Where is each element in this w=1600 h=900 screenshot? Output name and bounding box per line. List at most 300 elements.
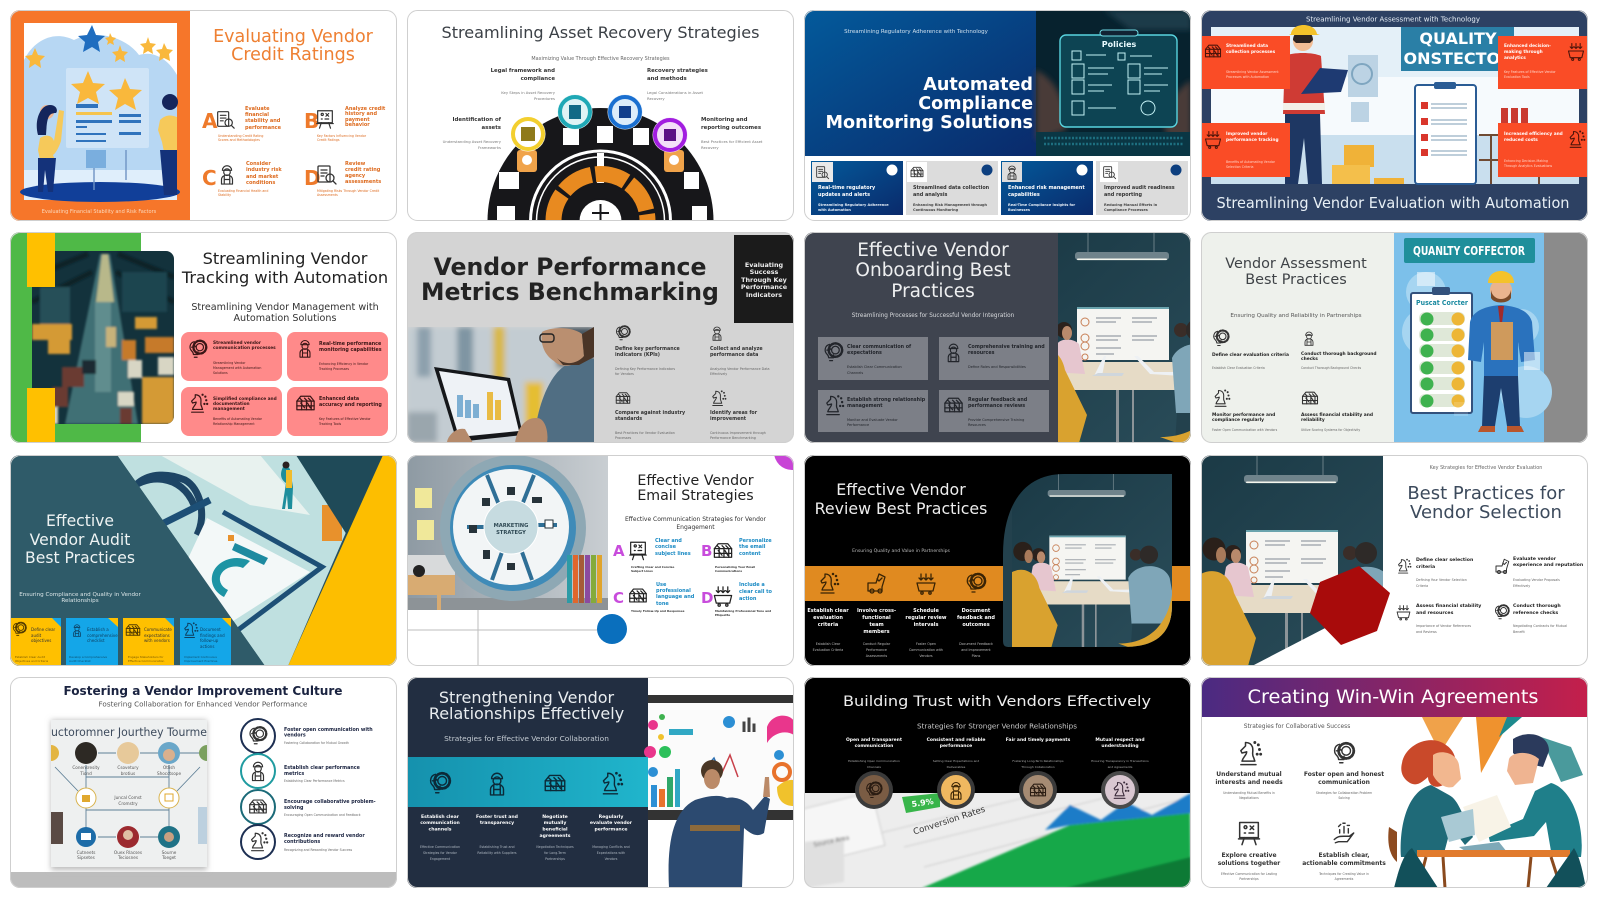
metric: KPIs: Define key performance xyxy=(615,346,681,352)
item C: industry risk: Consider xyxy=(246,161,271,167)
decoration: yellow bars xyxy=(27,232,55,443)
metric: improve xyxy=(710,391,766,440)
item: selection criteria: Defining Your Vendor Selection xyxy=(1416,578,1467,582)
item A: Crafting Clear and Concise xyxy=(631,565,674,569)
corner accent xyxy=(774,434,810,470)
callout: evaluating success: Performance xyxy=(741,283,788,291)
column: negotiate: Negotiate xyxy=(542,814,568,820)
tile 4: Improved audit readiness xyxy=(1104,185,1175,191)
tile: relationship: Monitor and Evaluate Vendor xyxy=(847,418,898,422)
callout: data collection xyxy=(1201,36,1290,89)
item: commitments: actionable commitments xyxy=(1302,860,1386,867)
black header xyxy=(804,677,1191,793)
step 1: Define clear xyxy=(31,627,56,632)
diagram: customer journey: Cromstry xyxy=(118,801,138,806)
item: identification: assets xyxy=(482,125,501,131)
metric: compare xyxy=(615,393,686,440)
step 3: Foster Open xyxy=(916,642,936,646)
item D: agency assessments: agency xyxy=(345,173,366,179)
step 4: and Improvement xyxy=(961,648,991,652)
metric: KPIs: for Vendors xyxy=(615,372,634,376)
column: mutual respect: Ensuring Transparency in Transactions xyxy=(1091,759,1149,763)
step 4: Document Feedback xyxy=(959,642,993,646)
item: creative solutions: solutions together xyxy=(1218,860,1280,867)
subtitle: Ensuring Quality and Reliability in Partnerships xyxy=(1230,313,1362,319)
title: Credit Ratings xyxy=(231,45,355,65)
column: evaluate: Regularly xyxy=(599,814,623,820)
item: reference checks: Benefit xyxy=(1513,630,1525,634)
item B: Personalizing Your Email xyxy=(715,565,755,569)
column: clear channels: Strategies for Vendor xyxy=(423,851,458,855)
title: Effective Vendor xyxy=(857,240,1009,261)
callout: efficiency: Increased efficiency and xyxy=(1504,131,1563,137)
step: metrics: Establishing Clear Performance Metrics xyxy=(284,779,345,783)
tile: data accuracy: Enhanced data xyxy=(319,396,359,402)
step 3: Engage Stakeholders for xyxy=(128,655,164,659)
panel: Streamlining Vendor Evaluation with Automation xyxy=(1201,10,1588,221)
column: clear channels: Effective Communication xyxy=(420,845,460,849)
step: recognize: Recognize and reward vendor xyxy=(284,833,365,839)
tile: communication xyxy=(818,337,928,380)
callout: performance tracking xyxy=(1201,123,1290,177)
step 1: Establish Clear Audit xyxy=(15,655,46,659)
chart: blurred conversion rates: 5.9% xyxy=(911,797,934,809)
step 1: Objectives and Criteria xyxy=(15,659,48,663)
item: monitor: Monitor performance and xyxy=(1212,412,1275,418)
step 2: comprehensive xyxy=(87,633,118,638)
item: open communication: Strategies for Collaboration Problem xyxy=(1316,791,1372,795)
step 4 xyxy=(180,618,231,666)
tile: monitoring xyxy=(287,332,388,381)
item: financial stability: Assess financial stability xyxy=(1416,603,1481,609)
illustration: marketing strategy wheel: STRATEGY xyxy=(496,530,526,536)
tile 3 xyxy=(1001,161,1093,215)
metric: collect: Effectively xyxy=(710,372,727,376)
item: commitments xyxy=(1302,823,1386,881)
title: Strengthening Vendor xyxy=(439,688,615,707)
column: clear channels: channels xyxy=(428,826,452,832)
callout: decision making: analytics xyxy=(1504,55,1526,61)
callout: efficiency: Through Analytics Evaluations xyxy=(1503,164,1553,168)
tile: compliance xyxy=(181,387,282,436)
title: Best Practices for xyxy=(1407,483,1565,504)
column: negotiate: Negotiation Techniques xyxy=(536,845,574,849)
metric: collect xyxy=(710,327,770,376)
illustration: inspector with checklist: QUANLTY COFFECTOR xyxy=(1413,244,1525,258)
item: selection criteria: criteria xyxy=(1416,564,1435,570)
callout: decision making: Evaluation Tools xyxy=(1504,75,1530,79)
subtitle: Maximizing Value Through Effective Recovery Strategies xyxy=(531,56,670,62)
item D: clear call to xyxy=(739,589,773,595)
callout: performance tracking: Benefits of Automating Vendor xyxy=(1226,160,1276,164)
tile: monitoring: Real-time performance xyxy=(319,341,382,347)
item: vendor experience: Evaluate vendor xyxy=(1513,556,1557,562)
metric: improve: Identify areas for xyxy=(710,410,758,416)
panel: Strengthening Vendor Relationships Effectively xyxy=(407,677,794,888)
item: reference checks: reference checks xyxy=(1513,610,1558,616)
tile 3: Businesses xyxy=(1008,208,1030,212)
caption: financial stability: Evaluating Financial Stability and Risk Factors xyxy=(42,209,157,215)
metric: improve: Performance Benchmarking xyxy=(710,436,756,440)
metric: improve: improvement xyxy=(710,416,747,422)
item: mutual interests: Negotiations xyxy=(1239,796,1259,800)
panel: Automated Compliance Monitoring Solutions xyxy=(804,10,1191,221)
item A: financial stability xyxy=(202,106,282,142)
item: recovery strategies: Recovery xyxy=(647,96,665,101)
column: mutual respect xyxy=(1091,737,1149,809)
tile 3: capabilities xyxy=(1008,192,1040,198)
item: open communication: communication xyxy=(1318,779,1370,786)
column: negotiate: agreements xyxy=(540,833,571,839)
item: identification: Understanding Asset Recovery xyxy=(443,139,502,144)
item: recovery strategies: and methods xyxy=(647,76,687,82)
step 4 xyxy=(957,574,995,658)
column: negotiate: Partnerships xyxy=(545,857,565,861)
step: recognize: Recognizing and Rewarding Vendor Success xyxy=(284,848,352,852)
tile 2 xyxy=(906,161,998,215)
item D: agency assessments: D xyxy=(304,166,321,190)
tile: data accuracy: Key Features of Effective Vendor xyxy=(319,417,371,421)
panel: Streamlining Vendor Tracking with Automation xyxy=(10,232,397,443)
column: evaluate: evaluate vendor xyxy=(590,820,633,826)
title: Vendor Assessment xyxy=(1225,256,1367,272)
callout: performance tracking: performance tracking xyxy=(1226,137,1279,143)
tile 4: Compliance Processes xyxy=(1104,208,1148,212)
item D: Maintaining Professional Tone and xyxy=(715,609,771,613)
tile 4: Reducing Manual Efforts in xyxy=(1104,203,1158,207)
item A: financial stability: performance xyxy=(245,125,282,131)
step 3: Vendors xyxy=(919,654,933,658)
tile 4 xyxy=(1096,161,1188,215)
step 2: checklist xyxy=(87,638,105,643)
callout: data collection: Streamlined data xyxy=(1226,43,1268,49)
item A: financial stability: Evaluate xyxy=(245,106,270,112)
title: Creating Win-Win Agreements xyxy=(1248,687,1538,708)
metric: compare: Best Practices for Vendor Evaluation xyxy=(615,431,675,435)
item A: financial stability: Scores and Methodologies xyxy=(218,138,260,142)
tile: feedback: Resources xyxy=(968,423,986,427)
item: mutual interests xyxy=(1215,742,1283,800)
diagram: customer journey: Tiond xyxy=(79,771,92,776)
column: evaluate: Expectations with xyxy=(597,851,625,855)
teal band xyxy=(407,757,648,807)
step 4: outcomes xyxy=(962,622,990,628)
item: monitoring xyxy=(701,117,763,150)
metric: compare: Processes xyxy=(615,436,632,440)
tile: communication: communication processes xyxy=(213,345,276,351)
tile: communication: Establish Clear Communication xyxy=(847,365,902,369)
step 3: Communicate xyxy=(144,627,172,632)
orange band xyxy=(804,566,1191,601)
step 1 xyxy=(10,618,61,666)
item D: action xyxy=(739,596,757,602)
column: timely payments: Fostering Long-Term Relationships xyxy=(1012,759,1064,763)
panel: Streamlining Asset Recovery Strategies xyxy=(407,10,794,221)
item: monitor: compliance regularly xyxy=(1212,417,1264,423)
subtitle: Strategies for Collaborative Success xyxy=(1244,724,1350,730)
panel: Evaluating Vendor Credit Ratings xyxy=(10,10,397,221)
item: financial stability: reliability xyxy=(1301,417,1325,423)
item: legal framework: Legal framework and xyxy=(491,68,555,74)
tile: communication: Streamlined vendor xyxy=(213,340,262,346)
item: financial stability: Importance of Vendor References xyxy=(1416,624,1471,628)
step 4: actions xyxy=(200,644,214,649)
column: negotiate: mutually xyxy=(544,820,566,826)
item: legal framework xyxy=(491,68,556,101)
item: reference checks: Negotiating Contracts for Mutual xyxy=(1513,624,1567,628)
item: financial stability: Utilize Scoring Systems for Objectivity xyxy=(1301,428,1360,432)
step 2: Establish a xyxy=(87,627,109,632)
subtitle: Streamlining Vendor Management with xyxy=(191,302,379,313)
item: legal framework: compliance xyxy=(521,76,555,82)
step 3: Communication with xyxy=(909,648,943,652)
callout: decision making: Key Features of Effective Vendor xyxy=(1504,70,1556,74)
step 2: Audit Checklist xyxy=(69,659,92,663)
subtitle: Relationships xyxy=(61,598,99,604)
column: trust: Establishing Trust and xyxy=(479,845,515,849)
step: problem solving: Encouraging Open Communication and Feedback xyxy=(284,813,361,817)
item: background checks: Conduct Thorough Background Checks xyxy=(1301,366,1362,370)
column: timely payments: Fair and timely payments xyxy=(1006,737,1071,743)
item B: credit history xyxy=(304,106,386,142)
tile: compliance: Simplified compliance and xyxy=(213,396,277,402)
item: financial stability: Assess financial stability and xyxy=(1301,412,1373,418)
metric: compare: Compare against industry xyxy=(615,410,686,416)
tile: compliance: management xyxy=(213,406,245,412)
step: problem solving xyxy=(241,790,376,824)
item: mutual interests: Understanding Mutual Benefits in xyxy=(1223,791,1275,795)
column: reliable performance: Deliverables xyxy=(947,765,966,769)
title: Effective Vendor xyxy=(637,473,754,489)
step 2: Conduct Regular xyxy=(863,642,891,646)
panel: Vendor Performance Metrics Benchmarking xyxy=(407,232,794,443)
column: timely payments xyxy=(1006,737,1071,809)
item: open communication xyxy=(1304,743,1384,800)
title: Automated xyxy=(923,75,1033,95)
step 2: functional xyxy=(862,615,891,621)
item B: content xyxy=(739,551,761,557)
title: Effective xyxy=(46,512,114,530)
image: policies hologram xyxy=(1036,10,1191,156)
item: criteria: Establish Clear Evaluation Criteria xyxy=(1212,366,1265,370)
tile: relationship: Performance xyxy=(847,423,869,427)
column: trust xyxy=(476,773,518,855)
column: evaluate xyxy=(590,773,633,861)
illustration: quality inspector: ONSTECTOR xyxy=(1404,49,1512,68)
tile: data accuracy: Tracking Tools xyxy=(318,422,341,426)
step: metrics xyxy=(241,754,361,788)
step 2 xyxy=(66,618,118,666)
tile 3: Enhanced risk management xyxy=(1008,185,1085,191)
item A: financial stability: stability and xyxy=(245,118,281,124)
diagram: customer journey: brotius xyxy=(121,771,135,776)
gear wheel graphic xyxy=(488,108,714,220)
tile: relationship xyxy=(818,390,928,432)
item B xyxy=(701,538,772,573)
step 3 xyxy=(123,618,174,666)
title: Fostering a Vendor Improvement Culture xyxy=(64,683,342,698)
step 3: Schedule xyxy=(913,608,939,614)
item C xyxy=(613,582,695,613)
item C: industry risk: Evaluating Financial Health and xyxy=(218,189,268,193)
callout: efficiency: Enhancing Decision-Making xyxy=(1504,159,1548,163)
item: commitments: Techniques for Creating Value in xyxy=(1318,872,1369,876)
item: identification: Identification of xyxy=(452,117,502,123)
icon: purple badge xyxy=(652,118,688,152)
panel: Effective Vendor Audit Best Practices xyxy=(10,455,397,666)
white diagonal xyxy=(1252,598,1383,666)
item A: subject lines xyxy=(655,551,691,557)
step 3: expectations xyxy=(144,633,170,638)
item: creative solutions xyxy=(1218,822,1280,881)
item C: industry risk xyxy=(202,161,282,197)
tile: feedback: Provide Comprehensive Training xyxy=(968,418,1024,422)
item: vendor experience: Evaluating Vendor Proposals xyxy=(1513,578,1560,582)
tile: feedback: Regular feedback and xyxy=(968,397,1028,403)
image: meeting room xyxy=(1027,232,1262,443)
subtitle: Strategies for Stronger Vendor Relationships xyxy=(917,722,1077,730)
title: Monitoring Solutions xyxy=(826,113,1033,133)
callout: decision making: making through xyxy=(1504,49,1543,55)
item A xyxy=(613,538,691,573)
step 1: evaluation xyxy=(813,615,843,621)
column: transparent communication: Channels xyxy=(867,765,881,769)
item: creative solutions: Explore creative xyxy=(1221,852,1277,859)
item A: Clear and xyxy=(655,538,682,544)
step 3: regular review xyxy=(905,615,947,621)
step 4: findings and xyxy=(200,633,225,638)
column: mutual respect: Mutual respect and xyxy=(1095,737,1145,743)
panel: Fostering a Vendor Improvement Culture xyxy=(10,677,397,888)
step 1: criteria xyxy=(818,622,838,628)
tile 1: updates and alerts xyxy=(818,192,870,198)
title: Best Practices xyxy=(25,549,135,567)
metric: compare: standards xyxy=(615,416,642,422)
title: Evaluating Vendor xyxy=(213,27,374,47)
column: mutual respect: understanding xyxy=(1101,743,1139,749)
column: clear channels xyxy=(420,773,460,861)
callout: evaluating success: Indicators xyxy=(746,291,782,299)
tile: communication xyxy=(181,332,282,381)
diagram: customer journey: Ouex Rlacses xyxy=(114,850,142,855)
callout: performance tracking: Selection Criteria xyxy=(1226,165,1254,169)
step: metrics: Establish clear performance xyxy=(284,765,361,771)
tile: compliance: Relationship Management xyxy=(213,422,255,426)
subtitle: Fostering Collaboration for Enhanced Vendor Performance xyxy=(99,700,308,708)
item C: professional xyxy=(656,588,691,594)
callout: evaluating success xyxy=(734,235,794,323)
column: reliable performance: Consistent and reliable xyxy=(927,737,985,743)
illustration: audit magnifier and documents xyxy=(10,455,397,666)
item B: credit history: Credit Ratings xyxy=(317,138,340,142)
diagram: customer journey: Cutneets xyxy=(77,850,95,855)
eyebrow: Streamlining Regulatory Adherence with Technology xyxy=(844,29,989,35)
title: Review Best Practices xyxy=(815,499,987,518)
red hexagon xyxy=(1310,566,1390,645)
item D: agency assessments xyxy=(304,161,381,197)
subtitle: Streamlining Processes for Successful Vendor Integration xyxy=(852,313,1015,319)
title: Metrics Benchmarking xyxy=(421,278,719,306)
panel: Effective Vendor Review Best Practices xyxy=(804,455,1203,666)
step: recognize: contributions xyxy=(284,839,320,845)
step 4: Improvement Practices xyxy=(184,659,218,663)
step: problem solving: Encourage collaborative problem- xyxy=(284,799,376,805)
column: evaluate: Vendors xyxy=(605,857,618,861)
column: negotiate xyxy=(536,775,574,861)
tile: communication: Clear communication of xyxy=(847,344,912,350)
item: criteria xyxy=(1212,330,1289,370)
subtitle: Ensuring Quality and Value in Partnerships xyxy=(852,548,951,554)
icon: blue badge xyxy=(608,94,642,130)
diagram: customer journey: Conensresity xyxy=(72,765,100,770)
step 3: with vendors xyxy=(144,638,170,643)
title: Effective Vendor xyxy=(836,480,966,499)
illustration: quality inspector: QUALITY xyxy=(1419,29,1497,48)
item: creative solutions: Effective Communication for Lasting xyxy=(1221,872,1277,876)
step 3: Effective Communication xyxy=(128,659,164,663)
tile 3: Real-Time Compliance Insights for xyxy=(1008,203,1075,207)
step 4: Document xyxy=(962,608,991,614)
item B: B xyxy=(701,542,712,560)
item: open communication: Solving xyxy=(1338,796,1350,800)
item: creative solutions: Partnerships xyxy=(1239,877,1259,881)
item B: credit history: payment xyxy=(345,117,370,123)
chart lines and blue marker xyxy=(407,610,627,666)
item: commitments: Establish clear, xyxy=(1318,852,1370,859)
tile: monitoring: Enhancing Efficiency in Vendor xyxy=(319,362,369,366)
item: selection criteria xyxy=(1399,557,1473,588)
title: Compliance xyxy=(918,94,1033,114)
column: transparent communication: Open and transparent xyxy=(846,737,903,743)
icon: teal badge xyxy=(558,94,592,130)
step 2: team xyxy=(869,622,884,628)
step 4: Plans xyxy=(972,654,981,658)
title: Vendor Selection xyxy=(1410,502,1562,523)
item C: C xyxy=(613,589,624,607)
tile: communication: Channels xyxy=(847,371,863,375)
step: problem solving: solving xyxy=(284,805,304,811)
tile: training: resources xyxy=(968,350,995,356)
callout: data collection: collection processes xyxy=(1226,49,1276,55)
illustration: quality inspector xyxy=(1211,25,1579,184)
step: open communication: vendors xyxy=(284,732,306,738)
step 1: audit xyxy=(31,633,42,638)
tile: relationship: management xyxy=(847,403,883,409)
tile: relationship: Establish strong relationship xyxy=(847,397,926,403)
column: timely payments: Through Collaboration xyxy=(1020,765,1055,769)
tile: communication: Streamlining Vendor xyxy=(213,361,246,365)
item D: agency assessments: credit rating xyxy=(345,167,381,173)
tile 4: and reporting xyxy=(1104,192,1142,198)
callout: decision making xyxy=(1498,36,1588,89)
image: meeting room xyxy=(1196,455,1431,666)
tile 1: Streamlining Regulatory Adherence xyxy=(818,203,889,207)
item C: industry risk: and market xyxy=(246,174,279,180)
metric: collect: performance data xyxy=(710,352,758,358)
tile: communication: Solutions xyxy=(213,371,228,375)
step 2: Assessments xyxy=(866,654,888,658)
item D: agency assessments: Assessments xyxy=(317,193,338,197)
step 2: Performance xyxy=(866,648,887,652)
illustration: marketing strategy wheel: MARKETING xyxy=(494,523,528,529)
column: trust: Reliability with Suppliers xyxy=(477,851,517,855)
item B: Communications xyxy=(715,569,742,573)
callout: evaluating success: Success xyxy=(750,268,779,276)
diagram: customer journey: Toeget xyxy=(161,855,176,860)
item C: industry risk: Stability xyxy=(218,193,231,197)
item B: credit history: behavior xyxy=(345,122,370,128)
step 4: Document xyxy=(200,627,221,632)
